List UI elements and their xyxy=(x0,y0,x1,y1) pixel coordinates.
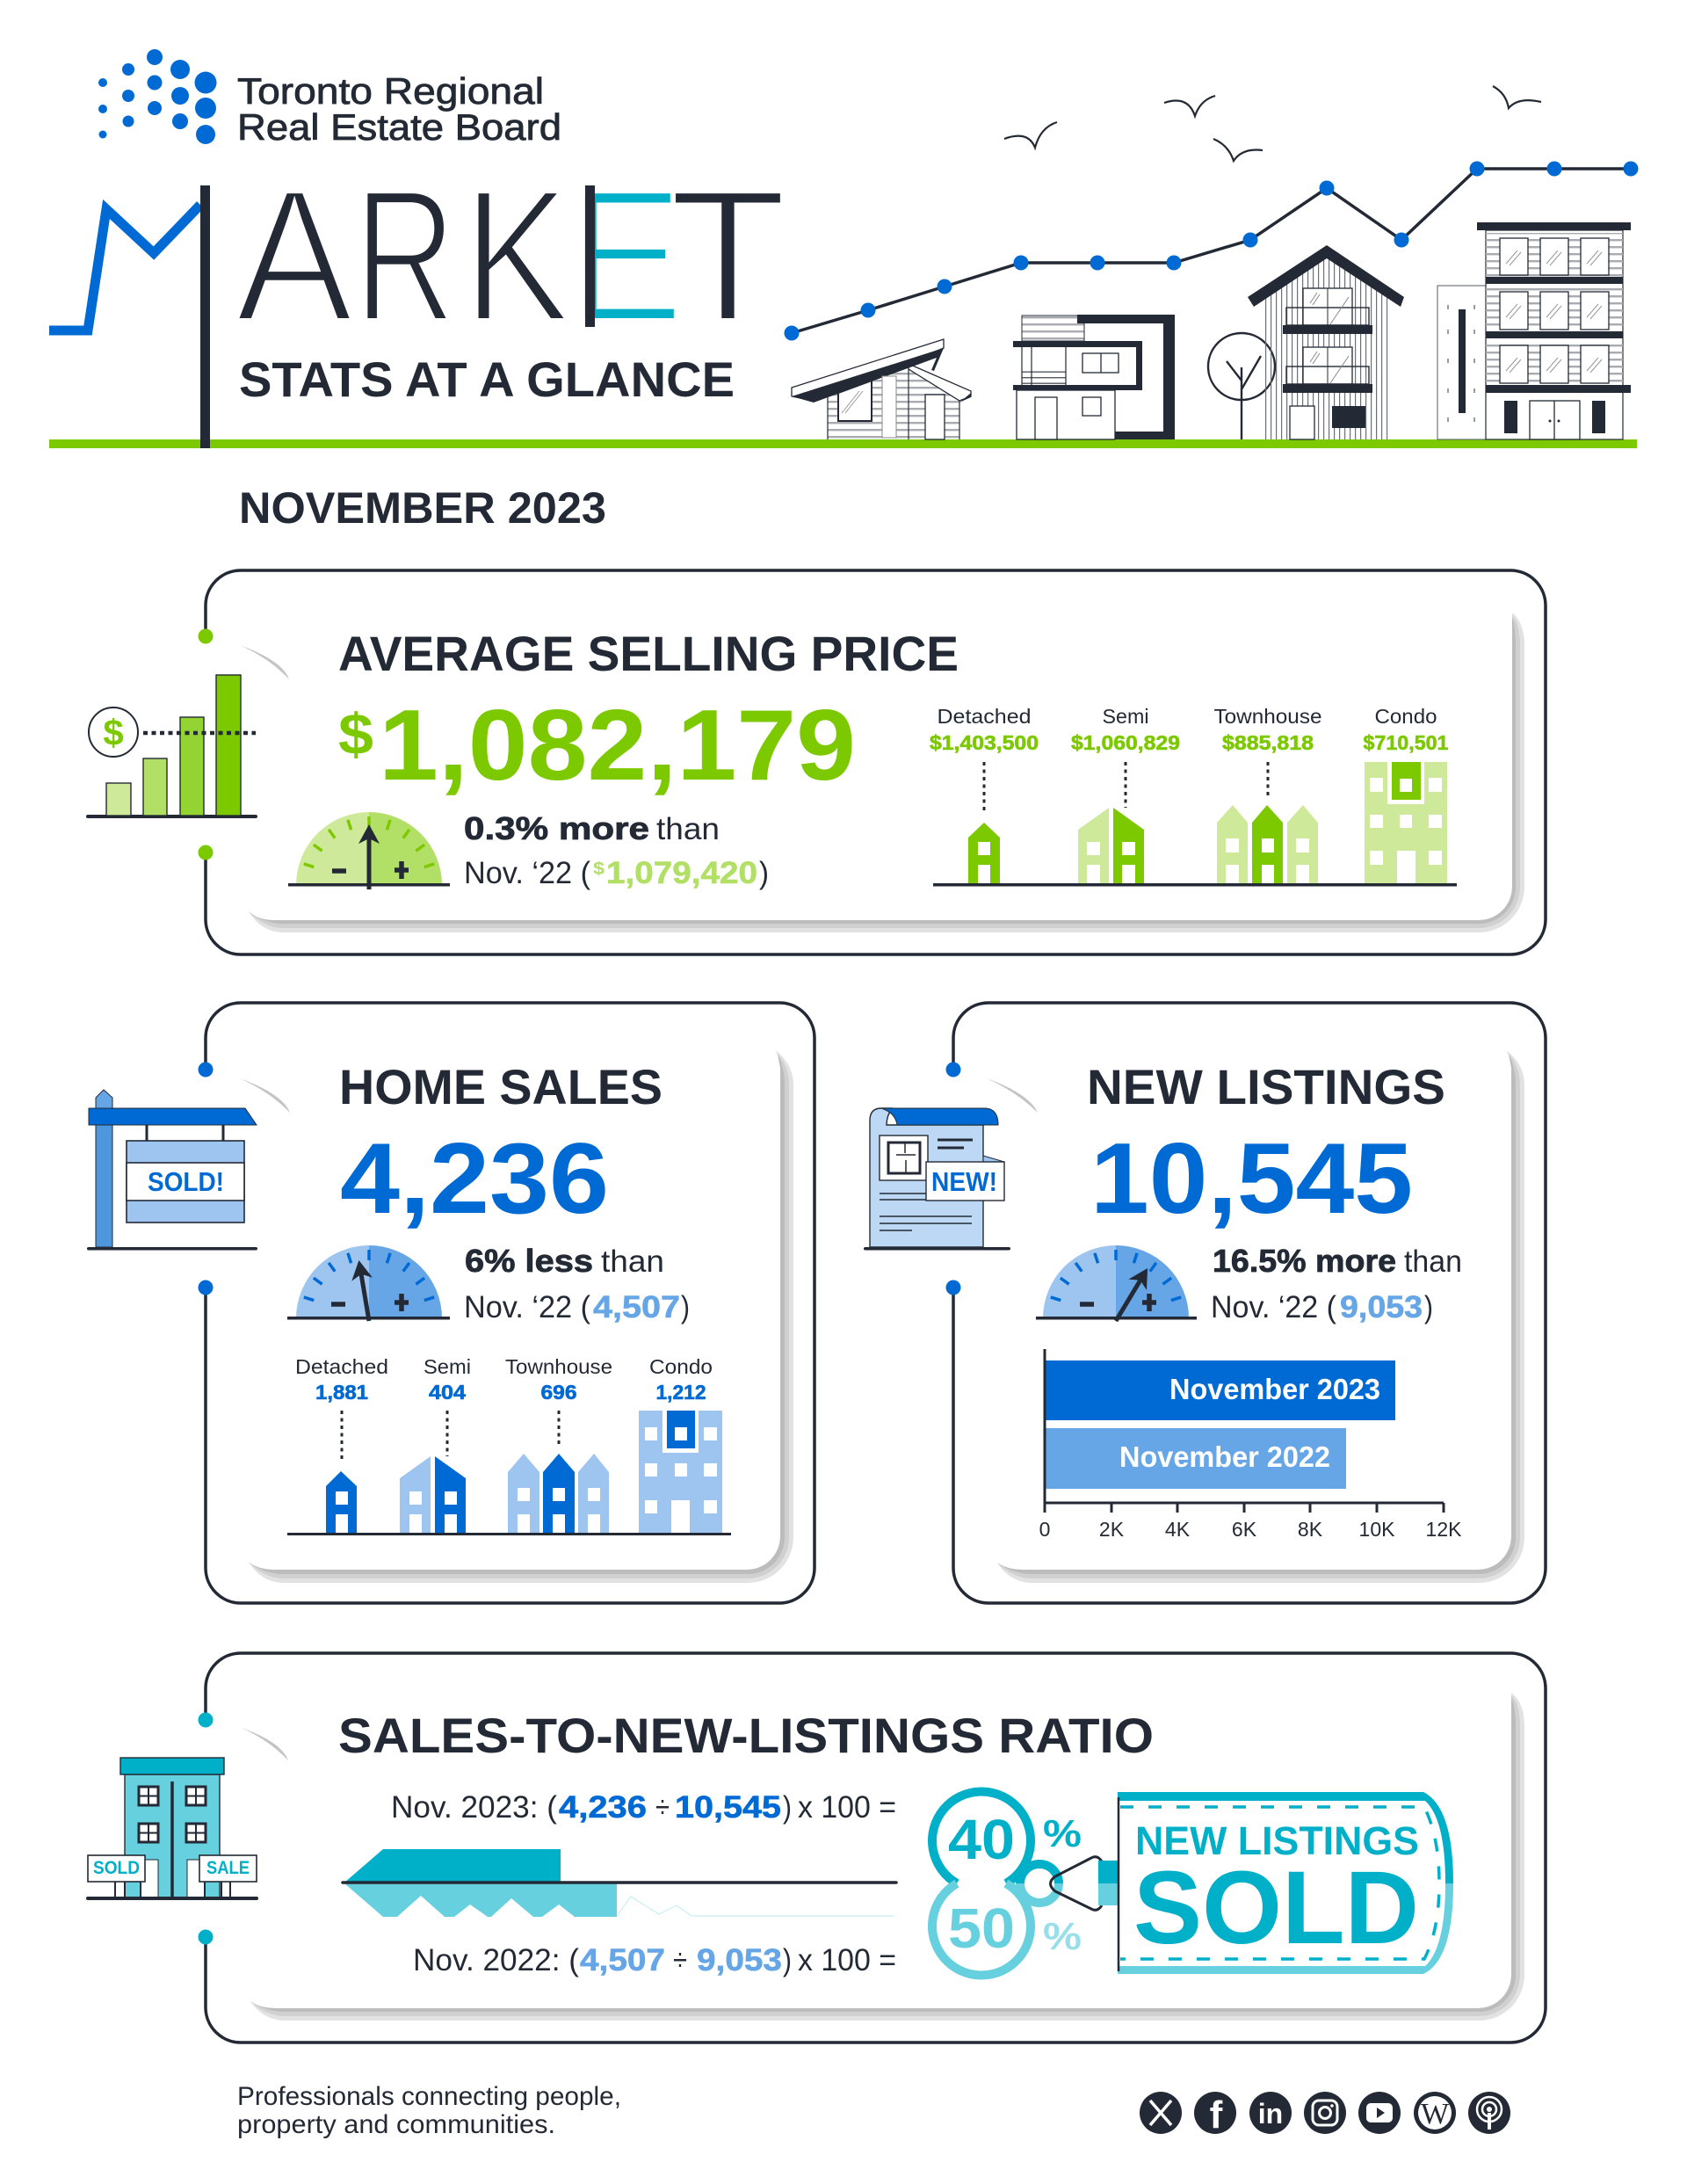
formula 2023: x 100 = xyxy=(798,1790,896,1825)
bar labels: November 2023 xyxy=(1169,1373,1380,1405)
comparison text xyxy=(464,810,769,890)
big number: 1,082,179 xyxy=(379,690,856,802)
formula 2023: ÷ xyxy=(655,1790,670,1825)
title vertical bar xyxy=(200,185,210,448)
panel frame xyxy=(206,1003,815,1603)
axis labels: 12K xyxy=(1426,1518,1462,1541)
housing type sales xyxy=(287,1355,731,1535)
icon: X xyxy=(1140,2092,1182,2134)
baseline xyxy=(287,1533,731,1535)
subtitle: STATS AT A GLANCE xyxy=(239,352,735,407)
icon: podcast xyxy=(1468,2092,1510,2134)
logo dots xyxy=(98,49,216,144)
type values: 1,881 xyxy=(315,1381,368,1404)
axes xyxy=(1045,1349,1444,1513)
icon: townhouses xyxy=(1217,805,1318,885)
logo: Toronto Regional Real Estate Board xyxy=(98,49,561,148)
title letters ARKET: T xyxy=(669,149,787,361)
icon: LinkedIn xyxy=(1249,2092,1292,2134)
comparison text: Nov. ‘22 ( xyxy=(464,856,590,890)
key teeth 2022 xyxy=(344,1883,617,1917)
icon: Facebook xyxy=(1194,2092,1236,2137)
card shadow xyxy=(242,1693,1524,2021)
comparison text: 1,079,420 xyxy=(606,856,757,890)
comparison text: 4,507 xyxy=(593,1290,680,1324)
axis labels: 4K xyxy=(1165,1518,1191,1541)
icon: YouTube xyxy=(1358,2092,1401,2134)
type values: $1,060,829 xyxy=(1071,731,1180,754)
frame dots xyxy=(199,1062,213,1295)
formula 2022: 4,507 xyxy=(580,1943,665,1977)
birds xyxy=(1004,86,1541,161)
key bow and ring xyxy=(932,1792,1059,1975)
icon: semi houses xyxy=(1078,808,1144,885)
house 2 xyxy=(1013,315,1175,439)
big number: 4,236 xyxy=(340,1123,609,1235)
faint key outline xyxy=(617,1897,894,1916)
icon: new listing document: NEW! xyxy=(931,1166,997,1197)
comparison text: Nov. ‘22 ( xyxy=(1211,1290,1336,1324)
comparison text: 16.5% more xyxy=(1213,1243,1396,1279)
gauge xyxy=(287,1245,450,1323)
formula 2023: Nov. 2023: ( xyxy=(391,1790,557,1825)
housing type prices xyxy=(930,705,1457,886)
tree xyxy=(1208,333,1275,439)
type values: 696 xyxy=(541,1381,576,1404)
bar labels xyxy=(1119,1373,1380,1473)
axis labels: 6K xyxy=(1232,1518,1257,1541)
icon: condo building with signs: SOLD xyxy=(93,1858,140,1878)
panel: average selling price xyxy=(86,570,1546,954)
formula 2022: x 100 = xyxy=(798,1943,896,1977)
icon: condo xyxy=(1365,762,1447,885)
axis labels: 0 xyxy=(1039,1518,1050,1541)
title: MARKET xyxy=(49,149,787,361)
axis labels: 8K xyxy=(1298,1518,1323,1541)
type labels: Condo xyxy=(1374,705,1437,728)
formula 2022: Nov. 2022: ( xyxy=(413,1943,579,1977)
icon: rising price bars: $ xyxy=(103,712,124,753)
sold tag xyxy=(1118,1792,1453,1974)
logo wordmark: Real Estate Board xyxy=(237,106,561,148)
baseline xyxy=(933,883,1457,886)
icon: new listing document xyxy=(864,1108,1010,1250)
comparison text: than xyxy=(601,1244,664,1279)
icon: rising price bars xyxy=(86,675,257,818)
formula 2023: 4,236 xyxy=(559,1790,647,1825)
icon: detached house xyxy=(968,823,1000,885)
key blade 2023 xyxy=(344,1849,561,1883)
big number: $ xyxy=(338,701,373,766)
logo wordmark: Toronto Regional xyxy=(237,70,544,112)
type labels: Detached xyxy=(937,705,1032,728)
sold tag: SOLD xyxy=(1133,1850,1419,1966)
icon: detached house xyxy=(326,1471,357,1534)
key shaft xyxy=(343,1881,896,1884)
house 3 xyxy=(1248,245,1404,439)
frame dots xyxy=(199,1712,213,1944)
panel: home sales xyxy=(87,1003,815,1603)
comparison text: $ xyxy=(593,860,605,879)
formula 2022: ) xyxy=(783,1943,792,1977)
icon: LinkedIn: in xyxy=(1258,2098,1283,2130)
card shadow xyxy=(240,613,1524,932)
ratio 50 percent xyxy=(948,1897,1082,1960)
social media icons xyxy=(1140,2092,1510,2137)
comparison text: ) xyxy=(759,856,769,890)
type values xyxy=(930,731,1449,754)
comparison text: than xyxy=(656,812,720,846)
comparison text xyxy=(1211,1243,1462,1324)
tag string xyxy=(1051,1857,1102,1910)
type labels: Semi xyxy=(1102,705,1149,728)
type labels xyxy=(295,1355,713,1378)
formula 2022 xyxy=(413,1943,896,1977)
card shadow xyxy=(240,1049,793,1583)
title letters ARKET: A xyxy=(235,149,353,361)
panel: new listings xyxy=(864,1003,1546,1603)
title E stem xyxy=(585,185,595,327)
tag connector xyxy=(1098,1861,1118,1905)
axis labels: 10K xyxy=(1359,1518,1395,1541)
title letters ARKET: R xyxy=(354,149,456,361)
icon: semi houses xyxy=(400,1456,466,1534)
skyline illustration xyxy=(784,86,1638,439)
date heading: NOVEMBER 2023 xyxy=(239,483,606,533)
type labels: Townhouse xyxy=(1214,705,1321,728)
gauge xyxy=(288,812,450,889)
comparison text: ) xyxy=(681,1290,690,1324)
icon: condo building with signs xyxy=(86,1758,258,1900)
type labels: Townhouse xyxy=(505,1355,612,1378)
footer tagline: property and communities. xyxy=(237,2110,555,2139)
bar chart xyxy=(1039,1349,1462,1541)
dotted leaders xyxy=(342,1411,559,1462)
panel frame xyxy=(206,1653,1546,2043)
ratio 50 percent: % xyxy=(1043,1915,1082,1958)
ratio 40 percent: % xyxy=(1043,1812,1082,1855)
ratio 40 percent: 40 xyxy=(948,1808,1015,1871)
comparison text: 9,053 xyxy=(1340,1290,1423,1324)
formula 2023: ) xyxy=(783,1790,792,1825)
heading: HOME SALES xyxy=(339,1059,662,1114)
ratio 50 percent: 50 xyxy=(948,1897,1015,1960)
title M line xyxy=(49,205,200,330)
apartment building xyxy=(1437,222,1631,439)
key ratio graphic xyxy=(343,1792,1453,1975)
icon: WordPress xyxy=(1414,2092,1456,2134)
type values: $885,818 xyxy=(1222,731,1314,754)
dotted leaders xyxy=(984,762,1268,813)
frame dots xyxy=(199,629,213,860)
type labels xyxy=(937,705,1437,728)
icon: condo xyxy=(639,1411,722,1534)
type labels: Semi xyxy=(424,1355,471,1378)
icon: Instagram xyxy=(1304,2092,1346,2134)
gauge xyxy=(1036,1245,1197,1326)
card shadow xyxy=(987,1049,1524,1583)
icon: WordPress: W xyxy=(1421,2098,1450,2130)
logo wordmark xyxy=(237,70,561,148)
icon: Facebook: f xyxy=(1210,2093,1223,2137)
type values: 404 xyxy=(429,1381,466,1404)
heading: NEW LISTINGS xyxy=(1087,1059,1445,1114)
ratio 40 percent xyxy=(948,1808,1082,1871)
formula 2023: 10,545 xyxy=(675,1790,781,1825)
title letters ARKET xyxy=(235,149,787,361)
November 2022 bar xyxy=(1045,1428,1346,1489)
icon: townhouses xyxy=(508,1454,609,1534)
price line chart xyxy=(784,162,1638,341)
formula 2022: 9,053 xyxy=(697,1943,782,1977)
comparison text xyxy=(464,1243,690,1324)
axis labels xyxy=(1039,1518,1462,1541)
ground line xyxy=(49,439,1637,448)
panel frame xyxy=(206,570,1546,954)
comparison text: than xyxy=(1404,1244,1462,1279)
footer tagline xyxy=(237,2082,621,2139)
formula 2022: ÷ xyxy=(673,1943,687,1977)
footer tagline: Professionals connecting people, xyxy=(237,2082,621,2111)
formula 2023 xyxy=(391,1790,896,1825)
axis labels: 2K xyxy=(1099,1518,1125,1541)
panel: sales-to-new-listings ratio xyxy=(86,1653,1546,2043)
frame dots xyxy=(945,1062,961,1295)
heading: AVERAGE SELLING PRICE xyxy=(338,626,959,681)
title letters ARKET: E xyxy=(568,149,684,361)
title letters ARKET: K xyxy=(463,149,570,361)
house 1 xyxy=(792,339,971,439)
icon: condo building with signs: SALE xyxy=(206,1858,250,1878)
icon: sold sign: SOLD! xyxy=(148,1166,224,1197)
type values: 1,212 xyxy=(655,1381,706,1404)
panel frame xyxy=(953,1003,1546,1603)
November 2023 bar xyxy=(1045,1360,1395,1420)
type values xyxy=(315,1381,706,1404)
sold tag: NEW LISTINGS xyxy=(1135,1818,1419,1863)
type labels: Detached xyxy=(295,1355,388,1378)
big number: 10,545 xyxy=(1090,1123,1413,1235)
icon: sold sign xyxy=(87,1090,257,1250)
type values: $1,403,500 xyxy=(930,731,1039,754)
comparison text: 0.3% more xyxy=(464,810,649,846)
type values: $710,501 xyxy=(1364,731,1449,754)
comparison text: ) xyxy=(1424,1290,1433,1324)
heading: SALES-TO-NEW-LISTINGS RATIO xyxy=(338,1708,1154,1763)
comparison text: 6% less xyxy=(465,1243,593,1279)
comparison text: Nov. ‘22 ( xyxy=(464,1290,590,1324)
bar labels: November 2022 xyxy=(1119,1440,1330,1473)
type labels: Condo xyxy=(649,1355,713,1378)
